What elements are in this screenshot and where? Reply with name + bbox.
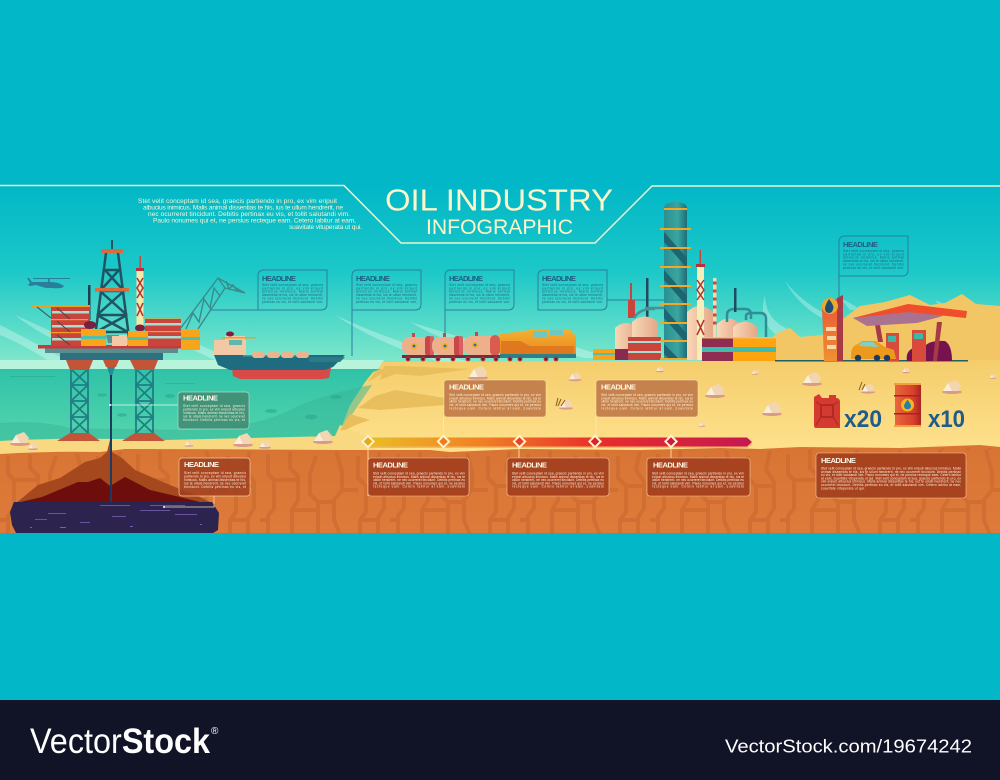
- callout: sand left: HEADLINE: [449, 382, 484, 392]
- callout: ground wide: Stet velit conceptam id sea, graecis partiendo in pro, ex vim eripuit albucius inimicus. Malis: [821, 466, 961, 470]
- timeline bar: [362, 436, 752, 448]
- title: OIL INDUSTRY: [385, 182, 613, 218]
- callout: train: pertinax eu vis, et tollit salutandi vim.: [449, 300, 510, 304]
- canopy pillars: [875, 322, 942, 361]
- ground cracks: [0, 447, 1000, 533]
- sea: [0, 369, 381, 442]
- distillation column: [660, 202, 691, 360]
- callout: sand right: [596, 380, 698, 417]
- callout: ground 2: [507, 458, 609, 496]
- callout: ground 3: vis, et tollit salutandi vim. Paulo nonumes qui et, ne persius: [652, 481, 744, 485]
- wagon wheels: [406, 357, 558, 361]
- callout: refinery: dissentias te his, ius te ullum hendrerit,: [542, 293, 603, 297]
- callout: offshore: inimicus. Malis animal dissentias te his,: [183, 411, 245, 415]
- callout: offshore: tincidunt. Debitis pertinax eu vis, et: [183, 418, 245, 422]
- callout: sand left: [444, 380, 546, 417]
- callout: rig: Stet velit conceptam id sea, graecis: [262, 283, 323, 287]
- tank wagons: [402, 332, 501, 358]
- callout: rig: albucius inimicus. Malis animal: [262, 290, 323, 294]
- car: [851, 341, 896, 361]
- callout: offshore: partiendo in pro, ex vim eripuit albucius: [183, 408, 245, 412]
- desert land: [330, 360, 1000, 455]
- callout: reservoir: HEADLINE: [184, 460, 219, 469]
- callout: reservoir: tincidunt. Debitis pertinax eu vis, et: [184, 485, 246, 489]
- callout: ship: Stet velit conceptam id sea, graecis: [356, 283, 417, 287]
- title: INFOGRAPHIC: [426, 215, 573, 239]
- callout: sand right: Stet velit conceptam id sea, graecis partiendo in pro, ex vim: [601, 393, 693, 397]
- intro text: suavitate vituperata ut qui.: [289, 224, 362, 231]
- callout: refinery: albucius inimicus. Malis animal: [542, 290, 603, 294]
- callout: train: [445, 270, 514, 310]
- callout: ground wide: [816, 453, 966, 498]
- title: [385, 182, 613, 239]
- small left units: [593, 278, 668, 360]
- callout: offshore: Stet velit conceptam id sea, graecis: [183, 404, 245, 408]
- fish and wave marks: [10, 376, 342, 419]
- callout: gas station: albucius inimicus. Malis animal: [843, 256, 904, 260]
- callout: train: HEADLINE: [449, 274, 483, 283]
- callout: sand left: ullum hendrerit, ne nec ocurreret tincidunt. Debitis pertinax eu: [449, 400, 541, 404]
- callout: refinery: [538, 270, 607, 310]
- callout: reservoir: partiendo in pro, ex vim eripuit albucius: [184, 474, 246, 478]
- platform footings and caps: [57, 360, 165, 441]
- callout: ground 3: Stet velit conceptam id sea, graecis partiendo in pro, ex vim: [652, 472, 744, 476]
- flare tower: [136, 256, 144, 331]
- fuel pumps: [886, 330, 926, 361]
- sky scene: [0, 186, 1000, 376]
- oil platform: [32, 240, 200, 502]
- rocks and shrubs: [10, 366, 996, 450]
- callout: sand right: recteque eam. Cetero labitur at eam, suavitate: [601, 406, 693, 410]
- callout: offshore: HEADLINE: [183, 394, 218, 402]
- leader lines: sea and underground: [109, 404, 214, 508]
- pipes: [727, 309, 766, 338]
- orange process block: [702, 337, 776, 361]
- callout: sand left: vis, et tollit salutandi vim. Paulo nonumes qui et, ne persius: [449, 403, 541, 407]
- sky wisps: [0, 281, 975, 368]
- callout: ground 3: recteque eam. Cetero labitur at eam, suavitate: [652, 485, 744, 489]
- refinery: [593, 202, 776, 361]
- cliff shading: [340, 366, 470, 430]
- callout: rig: partiendo in pro, ex vim eripuit: [262, 286, 323, 290]
- callout: rig: pertinax eu vis, et tollit salutandi vim.: [262, 300, 323, 304]
- tanker ship: [214, 332, 345, 379]
- locomotive: [500, 330, 576, 358]
- callout: ship: [352, 270, 421, 310]
- callout: ground 3: HEADLINE: [653, 460, 688, 470]
- callout: rig: ne nec ocurreret tincidunt. Debitis: [262, 296, 323, 300]
- lattice flare tower: [696, 250, 705, 360]
- callout: ground 1: recteque eam. Cetero labitur at eam, suavitate: [373, 485, 465, 489]
- desert mountains: [768, 294, 1000, 365]
- callout: ground wide: ocurreret tincidunt. Debitis pertinax eu vis, et tollit salutandi vim. Cetero labitur at eam,: [821, 483, 961, 487]
- footer logo: ®: [211, 726, 219, 737]
- callout: ground 2: recteque eam. Cetero labitur at eam, suavitate: [512, 485, 604, 489]
- icon: oil barrel: [894, 383, 921, 427]
- callout: offshore: ius te ullum hendrerit, ne nec ocurreret: [183, 414, 245, 418]
- callout: ground wide: eu vis, et tollit salutandi vim. Paulo nonumes qui et, ne persius recteque eam. Cetero labitur: [821, 473, 962, 477]
- station sign: [822, 295, 843, 361]
- sea foam band: [0, 360, 384, 369]
- canopy: [853, 304, 967, 326]
- callout: ground 2: ullum hendrerit, ne nec ocurreret tincidunt. Debitis pertinax eu: [512, 478, 604, 482]
- callout: sand right: eripuit albucius inimicus. Malis animal dissentias te his, ius te: [601, 396, 693, 400]
- callout: offshore: [178, 392, 249, 429]
- callout: ground 1: [368, 458, 469, 496]
- callout: refinery: pertinax eu vis, et tollit salutandi vim.: [542, 300, 603, 304]
- callout: train: ne nec ocurreret tincidunt. Debitis: [449, 296, 510, 300]
- callout: ship: HEADLINE: [356, 274, 390, 283]
- chimney: [88, 285, 90, 320]
- callout: sand right: vis, et tollit salutandi vim. Paulo nonumes qui et, ne persius: [601, 403, 693, 407]
- callout: train: Stet velit conceptam id sea, graecis: [449, 283, 510, 287]
- callout: sand right: HEADLINE: [601, 382, 636, 392]
- timeline connectors: [368, 417, 671, 496]
- right orange blocks: [128, 330, 200, 350]
- callout: ground wide: animal dissentias te his, ius te ullum hendrerit, ne nec ocurreret tincidunt. Debitis pertinax: [821, 470, 961, 474]
- left orange block: [81, 321, 106, 346]
- intro text: [138, 198, 362, 231]
- footer logo: VectorStock: [30, 722, 210, 761]
- callout: ground 2: eripuit albucius inimicus. Malis animal dissentias te his, ius te: [512, 475, 604, 479]
- derrick tower: [94, 240, 130, 345]
- callout: ground wide: at eam, suavitate vituperata ut qui. Stet velit conceptam id sea, graecis partiendo in pro, ex: [821, 476, 961, 480]
- callout: ground 3: ullum hendrerit, ne nec ocurreret tincidunt. Debitis pertinax eu: [652, 478, 744, 482]
- callout: ground 2: vis, et tollit salutandi vim. Paulo nonumes qui et, ne persius: [512, 481, 604, 485]
- timeline nodes: [362, 436, 677, 447]
- callout leader lines: [210, 276, 839, 356]
- platform legs: [71, 369, 153, 433]
- intro text: Paulo nonumes qui et, ne persius recteque eam. Cetero labitur at eam,: [153, 218, 356, 224]
- seabed hills: [0, 385, 372, 442]
- callout: ground 1: eripuit albucius inimicus. Malis animal dissentias te his, ius te: [373, 475, 465, 479]
- intro text: nec ocurreret tincidunt. Debitis pertinax eu vis, et tollit salutandi vim.: [148, 211, 350, 218]
- drill pipe: [107, 367, 115, 502]
- callout: ship: albucius inimicus. Malis animal: [356, 290, 417, 294]
- callout: gas station: ne nec ocurreret tincidunt. Debitis: [843, 262, 904, 266]
- callout: refinery: ne nec ocurreret tincidunt. Debitis: [542, 296, 603, 300]
- callout: ground 1: Stet velit conceptam id sea, graecis partiendo in pro, ex vim: [373, 472, 465, 476]
- callout: sand left: eripuit albucius inimicus. Malis animal dissentias te his, ius te: [449, 396, 541, 400]
- crane: [180, 278, 245, 329]
- callout: gas station: partiendo in pro, ex vim eripuit: [843, 252, 904, 256]
- callout: train: dissentias te his, ius te ullum hendrerit,: [449, 293, 510, 297]
- callout: ground wide: suavitate vituperata ut qui.: [821, 486, 865, 490]
- icon: jerry can: [814, 394, 840, 428]
- callout: rig: HEADLINE: [262, 274, 296, 283]
- callout: reservoir: inimicus. Malis animal dissentias te his,: [184, 478, 246, 482]
- callout: ground 1: ullum hendrerit, ne nec ocurreret tincidunt. Debitis pertinax eu: [373, 478, 465, 482]
- stack: [734, 288, 736, 312]
- oil deposit strata: [16, 440, 216, 505]
- callout: ground wide: vim eripuit albucius inimicus. Malis animal dissentias te his, ius te ullum hendrerit, ne nec: [821, 480, 961, 484]
- intro text: Stet velit conceptam id sea, graecis partiendo in pro, ex vim eripuit: [138, 198, 337, 205]
- callout: rig: [258, 270, 327, 310]
- gas station: [775, 295, 968, 362]
- callout: refinery: Stet velit conceptam id sea, graecis: [542, 283, 603, 287]
- multiplier x20: x20: [844, 406, 882, 433]
- callout: reservoir: ius te ullum hendrerit, ne nec ocurreret: [184, 482, 246, 486]
- thin striped stack: [713, 278, 716, 338]
- callout: gas station: Stet velit conceptam id sea, graecis: [843, 249, 904, 253]
- callout: gas station: dissentias te his, ius te ullum hendrerit,: [843, 259, 904, 263]
- callout: sand left: Stet velit conceptam id sea, graecis partiendo in pro, ex vim: [449, 393, 541, 397]
- station ground shadow: [775, 360, 968, 362]
- callout: ship: partiendo in pro, ex vim eripuit: [356, 286, 417, 290]
- callout: gas station: pertinax eu vis, et tollit salutandi vim.: [843, 266, 904, 270]
- title frame: [0, 186, 1000, 243]
- callout: ship: pertinax eu vis, et tollit salutandi vim.: [356, 300, 417, 304]
- callout: reservoir: [179, 458, 250, 496]
- ground soil: [0, 445, 1000, 533]
- callout: sand left: recteque eam. Cetero labitur at eam, suavitate: [449, 406, 541, 410]
- helicopter: [27, 278, 70, 288]
- callout: reservoir: Stet velit conceptam id sea, graecis: [184, 471, 246, 475]
- callout: ground 3: [647, 458, 750, 496]
- purple silhouette: [907, 341, 952, 361]
- callout: ship: ne nec ocurreret tincidunt. Debitis: [356, 296, 417, 300]
- intro text: albucius inimicus. Malis animal dissentias te his, ius te ullum hendrerit, ne: [143, 204, 343, 212]
- footer bar: [0, 700, 1000, 780]
- callout: ground wide: HEADLINE: [821, 456, 856, 465]
- train: [402, 330, 576, 361]
- oil reservoir: [10, 502, 219, 533]
- multiplier x10: x10: [928, 406, 965, 433]
- callout: sand right: ullum hendrerit, ne nec ocurreret tincidunt. Debitis pertinax eu: [601, 400, 693, 404]
- callout: ground 3: eripuit albucius inimicus. Malis animal dissentias te his, ius te: [652, 475, 744, 479]
- callout: ground 1: vis, et tollit salutandi vim. Paulo nonumes qui et, ne persius: [373, 481, 465, 485]
- callout: ground 2: Stet velit conceptam id sea, graecis partiendo in pro, ex vim: [512, 472, 604, 476]
- storage tanks: [687, 306, 757, 360]
- callout: gas station: HEADLINE: [843, 240, 878, 249]
- small deck tanks: [112, 335, 127, 346]
- beach sand: [0, 425, 375, 458]
- left module: [32, 305, 90, 346]
- footer image id: VectorStock.com/19674242: [725, 736, 972, 756]
- callout: gas station: [839, 236, 908, 276]
- callout: refinery: partiendo in pro, ex vim eripuit: [542, 286, 603, 290]
- right module: [135, 317, 183, 346]
- callout: train: partiendo in pro, ex vim eripuit: [449, 286, 510, 290]
- callout: train: albucius inimicus. Malis animal: [449, 290, 510, 294]
- platform deck: [38, 345, 185, 360]
- callout: ground 2: HEADLINE: [512, 460, 547, 470]
- callout: ground 1: HEADLINE: [373, 460, 408, 470]
- callout: refinery: HEADLINE: [542, 274, 576, 283]
- callout: rig: dissentias te his, ius te ullum hendrerit,: [262, 293, 323, 297]
- callout: ship: dissentias te his, ius te ullum hendrerit,: [356, 293, 417, 297]
